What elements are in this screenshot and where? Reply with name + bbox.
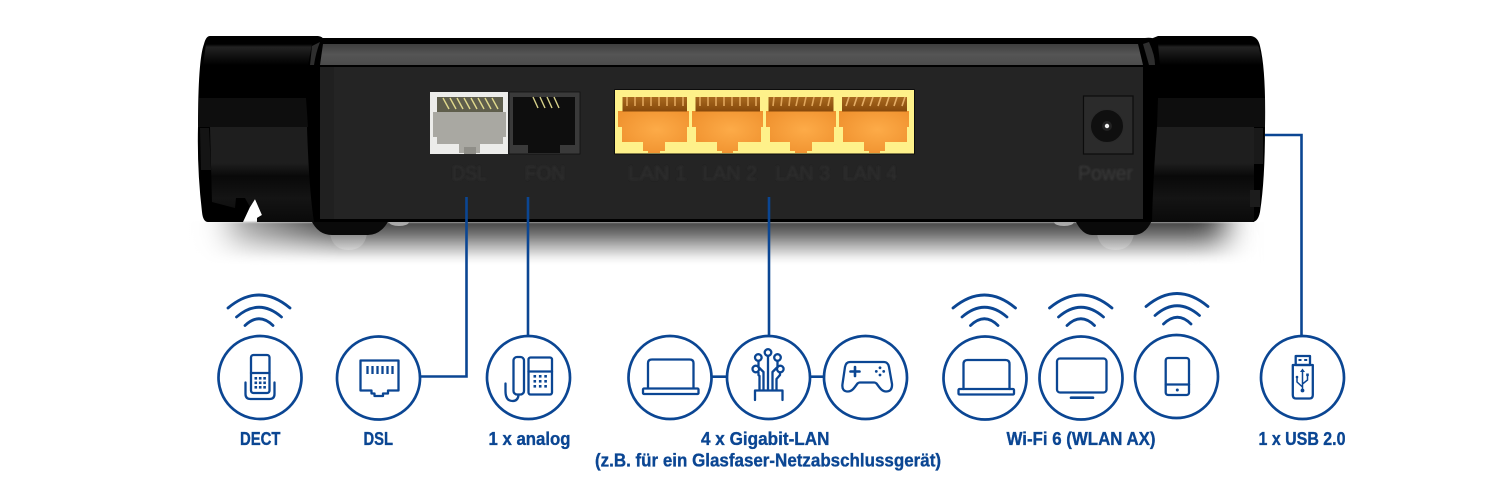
icon: Wi-Fi laptop — [944, 336, 1026, 420]
LAN 4 — [839, 97, 909, 153]
LAN 2 — [692, 97, 763, 153]
connector line: DSL — [420, 197, 466, 376]
router shadow — [170, 215, 1225, 270]
port labels on housing: LAN 1 — [628, 163, 687, 185]
right foot — [1054, 218, 1152, 250]
router device — [198, 36, 1265, 250]
icon: Wi-Fi waves TV — [1050, 295, 1112, 326]
connector line: LAN — [768, 197, 770, 336]
left end cap — [198, 36, 323, 222]
label: 4 x Gigabit-LAN: 4 x Gigabit-LAN — [701, 429, 830, 449]
left foot — [311, 218, 409, 250]
port labels on housing: LAN 2 — [702, 163, 757, 185]
port labels on housing: FON — [525, 163, 565, 185]
icon: DECT handset — [218, 336, 302, 419]
ports: LAN 1-4 — [614, 89, 915, 154]
connector links between LAN circles — [712, 375, 824, 378]
icon: DSL port — [337, 336, 420, 420]
port labels on housing: LAN 3 — [775, 163, 830, 185]
port: DSL — [430, 92, 508, 154]
label: 1 x analog: 1 x analog — [488, 429, 570, 449]
port: power jack — [1084, 96, 1133, 154]
icon: game controller — [824, 336, 907, 419]
icon: Wi-Fi waves tablet — [1146, 294, 1208, 324]
icon: Wi-Fi waves laptop — [953, 295, 1016, 326]
port: FON — [509, 92, 580, 154]
label: DECT: DECT — [240, 429, 281, 449]
label: DSL: DSL — [364, 429, 393, 449]
icon: Wi-Fi TV — [1040, 336, 1122, 420]
icon: Wi-Fi tablet — [1135, 335, 1218, 418]
label: 1 x USB 2.0: 1 x USB 2.0 — [1258, 429, 1346, 449]
main body — [310, 38, 1158, 222]
icon: USB stick — [1261, 336, 1344, 419]
port labels on housing — [452, 163, 1133, 185]
LAN 1 — [618, 97, 689, 153]
connector line: USB — [1265, 135, 1302, 336]
icon: analog telephone — [487, 336, 570, 419]
icon: DECT wifi waves — [228, 295, 290, 326]
connector line: analog — [527, 197, 529, 336]
icon: fiber optic — [727, 336, 810, 419]
right end cap — [1143, 36, 1265, 222]
label: Wi-Fi 6 (WLAN AX): Wi-Fi 6 (WLAN AX) — [1006, 429, 1156, 449]
port labels on housing: LAN 4 — [843, 163, 897, 185]
LAN 3 — [766, 97, 836, 153]
label: LAN example note: (z.B. für ein Glasfaser-Netzabschlussgerät) — [595, 450, 941, 470]
port labels on housing: DSL — [452, 163, 487, 185]
icon: LAN laptop — [628, 336, 712, 419]
port labels on housing: Power — [1078, 163, 1133, 185]
